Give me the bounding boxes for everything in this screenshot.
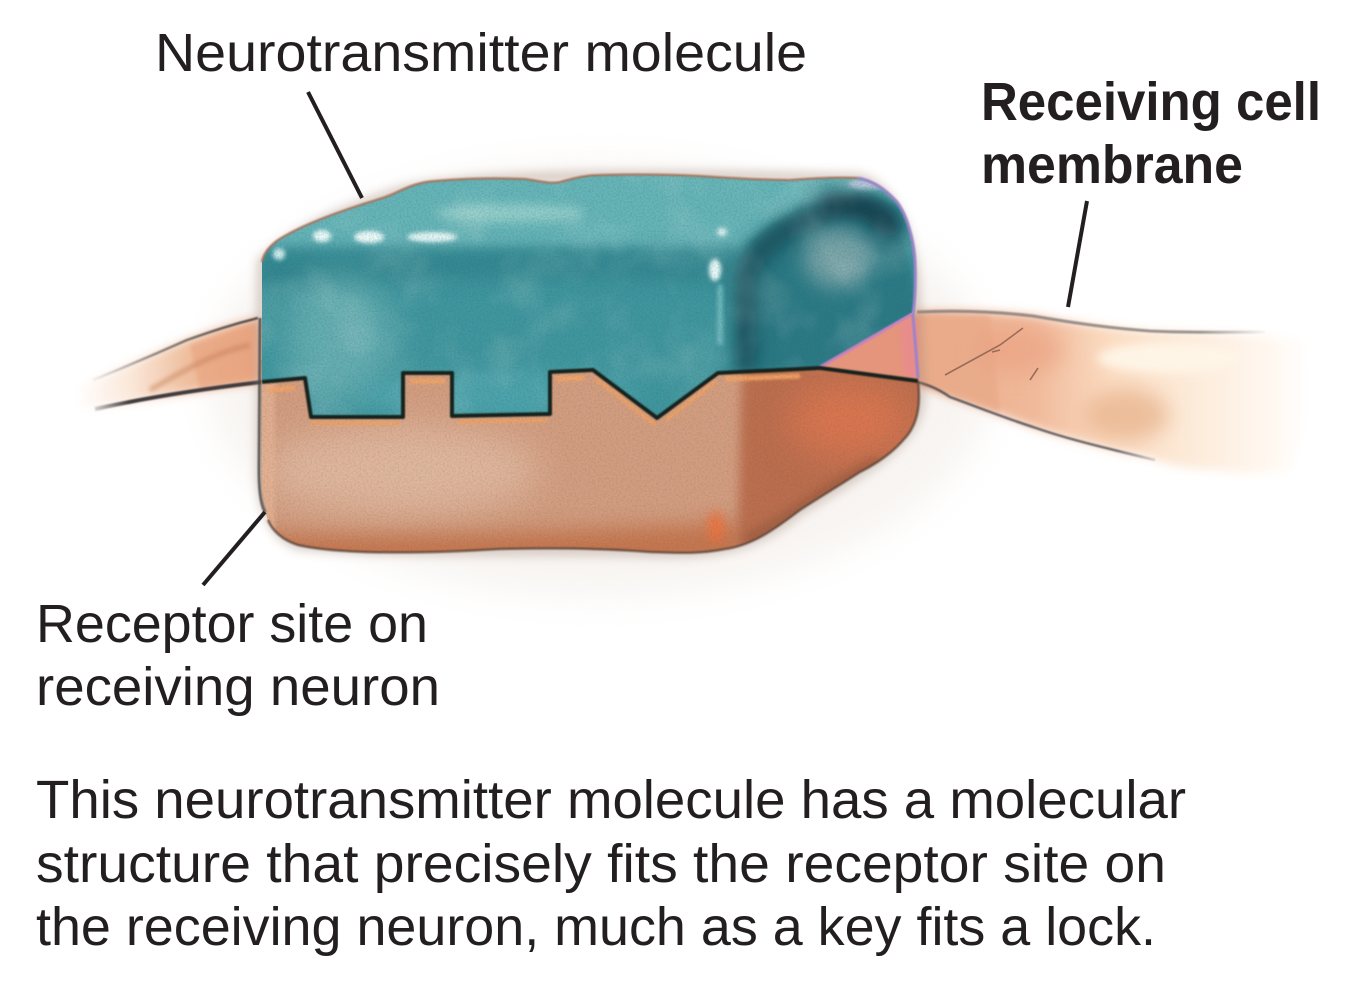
label: receiving cell membrane line 1: Receiving cell (981, 72, 1321, 132)
dark vertical block edge (259, 318, 265, 512)
left membrane (60, 318, 262, 410)
right membrane (905, 311, 1330, 473)
label: receiving cell membrane line 2: membrane (981, 135, 1243, 195)
pink membrane overlap (820, 178, 919, 381)
label line: receptor (203, 512, 265, 585)
label line: neurotransmitter (308, 92, 362, 198)
receptor site (261, 360, 922, 555)
neurotransmitter molecule (250, 165, 930, 425)
label: neurotransmitter molecule: Neurotransmitter molecule (155, 23, 807, 83)
key and lock interface line (262, 368, 918, 418)
caption line 3: the receiving neuron, much as a key fits a lock. (36, 897, 1156, 957)
label: receptor site line 1: Receptor site on (36, 594, 428, 654)
caption line 2: structure that precisely fits the receptor site on (36, 834, 1166, 894)
soft background haze (210, 165, 990, 595)
caption line 1: This neurotransmitter molecule has a molecular (36, 770, 1186, 830)
shadow around block (261, 175, 920, 553)
label: receptor site line 2: receiving neuron (36, 657, 440, 717)
label line: membrane (1068, 201, 1087, 307)
